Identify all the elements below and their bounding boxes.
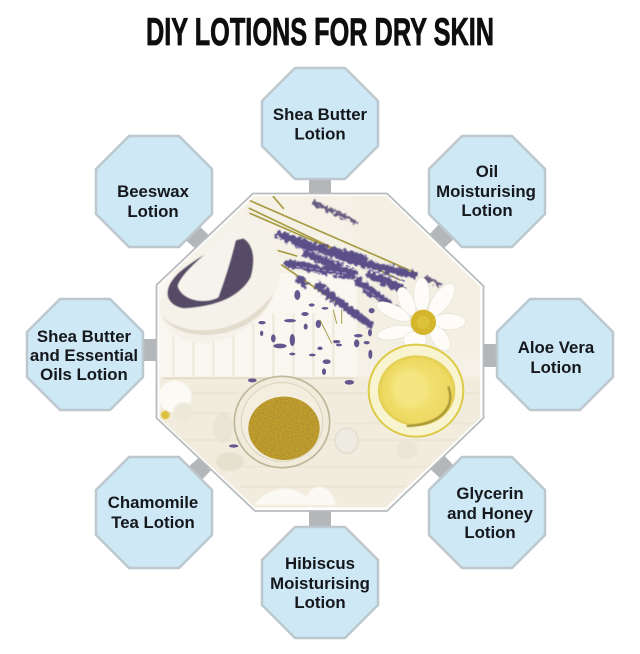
towel <box>160 273 357 378</box>
panel: Chamomile Tea Lotion: Tea Lotion <box>111 513 195 532</box>
panel: Hibiscus Moisturising Lotion: Moisturising <box>270 574 370 593</box>
lavender blossoms <box>280 235 413 324</box>
panel: Glycerin and Honey Lotion: Glycerin <box>456 484 524 503</box>
panel: Aloe Vera Lotion <box>497 299 613 410</box>
panel: Oil Moisturising Lotion: Lotion <box>461 201 513 220</box>
panel: Shea Butter and Essential Oils Lotion: Oils Lotion <box>40 365 128 384</box>
stones <box>214 415 359 471</box>
daisy <box>374 278 466 354</box>
panel: Shea Butter Lotion: Shea Butter <box>273 105 368 124</box>
photo: mortar, lavender, daisy, oil and pollen bowls <box>153 190 487 513</box>
panel: Shea Butter and Essential Oils Lotion <box>27 299 143 410</box>
panel: Shea Butter Lotion: Lotion <box>294 124 346 144</box>
panel: central photo <box>153 190 487 513</box>
panel: Oil Moisturising Lotion: Oil <box>476 162 498 181</box>
panel: Shea Butter Lotion <box>262 68 378 179</box>
panel: Glycerin and Honey Lotion: and Honey <box>447 504 534 523</box>
faded flowers <box>158 381 337 505</box>
panel: Beeswax Lotion <box>96 136 212 247</box>
lavender <box>249 197 440 343</box>
lavender stems <box>248 196 418 308</box>
panel: Shea Butter and Essential Oils Lotion: Shea Butter <box>37 327 132 346</box>
panel: Shea Butter and Essential Oils Lotion: and Essential <box>30 346 138 365</box>
panel: Hibiscus Moisturising Lotion <box>262 527 378 638</box>
panel: Hibiscus Moisturising Lotion: Lotion <box>294 593 346 612</box>
panel: Aloe Vera Lotion: Lotion <box>530 358 582 377</box>
panel: Chamomile Tea Lotion <box>96 457 212 568</box>
panel: Oil Moisturising Lotion: Moisturising <box>436 182 536 201</box>
oil bowl <box>369 345 463 437</box>
panel: Chamomile Tea Lotion: Chamomile <box>108 493 198 512</box>
panel: Glycerin and Honey Lotion <box>429 457 545 568</box>
mortar <box>162 238 274 342</box>
panel: Hibiscus Moisturising Lotion: Hibiscus <box>285 554 355 573</box>
wood grain <box>160 393 480 487</box>
panel: Glycerin and Honey Lotion: Lotion <box>464 523 516 542</box>
panel: Beeswax Lotion: Beeswax <box>117 182 190 201</box>
pollen bowl <box>234 376 330 468</box>
panel: Oil Moisturising Lotion <box>429 136 545 247</box>
photo frame <box>156 194 484 511</box>
connectors <box>141 179 499 528</box>
panel: Beeswax Lotion: Lotion <box>127 202 179 221</box>
panel: Aloe Vera Lotion: Aloe Vera <box>518 338 595 357</box>
scattered buds <box>229 290 375 448</box>
